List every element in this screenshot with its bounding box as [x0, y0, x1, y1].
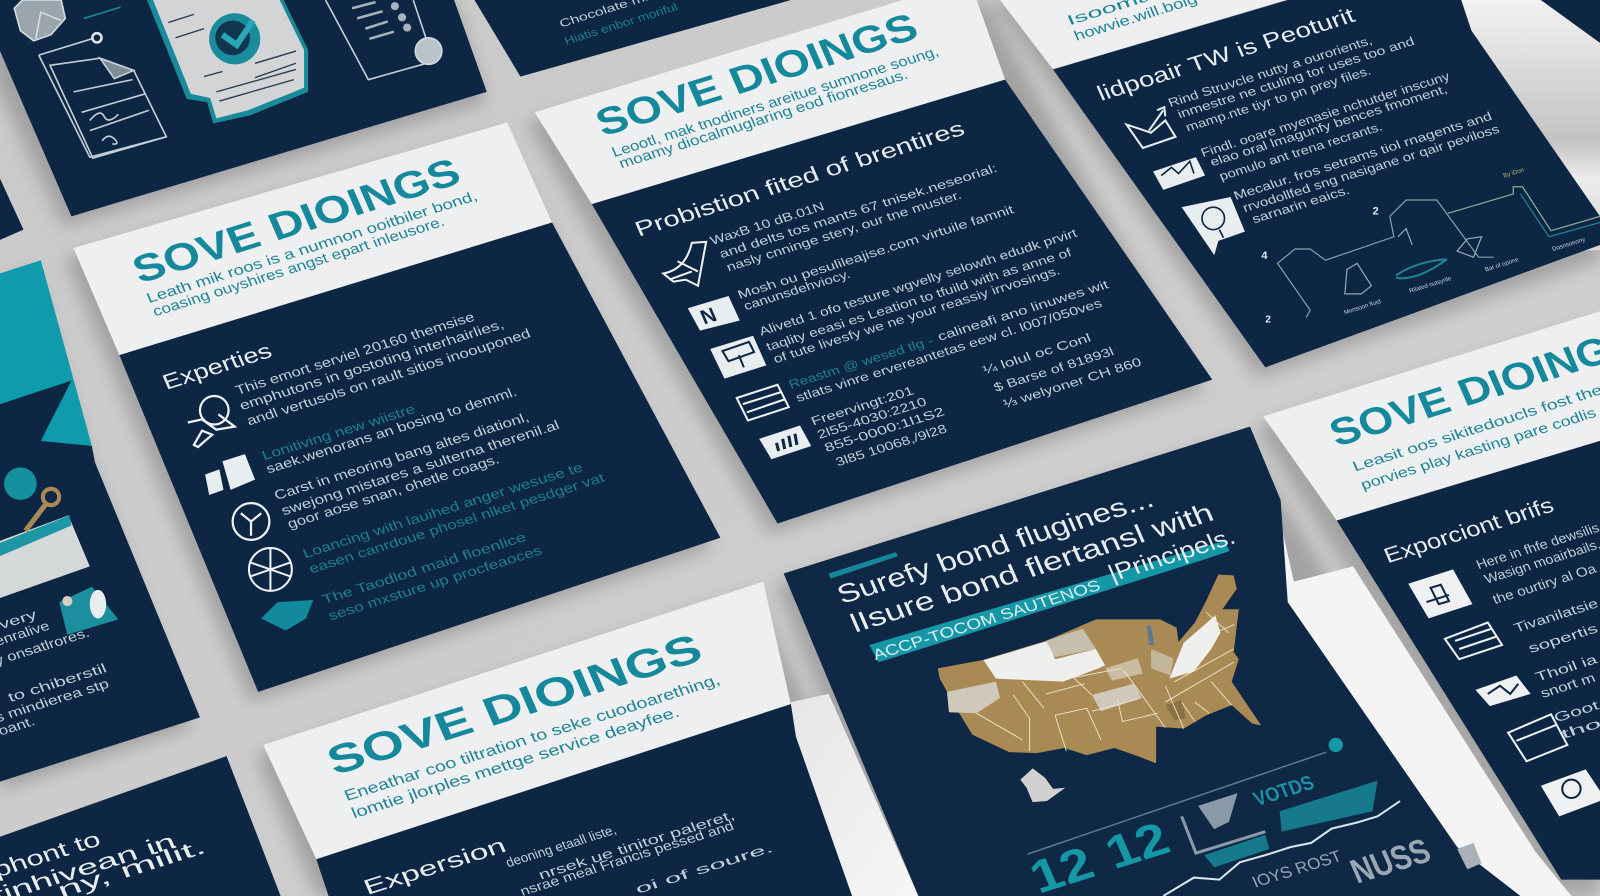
subtitle: lomtie jlorples mettge service deayfee.	[349, 704, 682, 822]
band text: ACCP-TOCOM SAUTENOS	[870, 577, 1103, 664]
icon: wheel	[249, 548, 292, 591]
body text: ¼ lolul oc Conl	[980, 331, 1093, 377]
partial text	[0, 607, 111, 740]
diagram labels: Dosnsoeony	[1551, 236, 1587, 253]
subtitle: Leath mik roos is a numnon ooitbiler bond,	[144, 189, 480, 307]
header band	[1000, 0, 1286, 69]
icon: box	[1408, 569, 1472, 618]
diagram labels	[1261, 166, 1587, 325]
body text: The Taodlod maid floenlice	[320, 529, 528, 607]
body text: Mecalur. fros setrams tiol rnagents and	[1231, 109, 1494, 203]
icon: left document outline	[39, 33, 166, 158]
header band	[73, 122, 552, 355]
teal panel	[0, 260, 92, 446]
white sheet behind map card, right	[1276, 500, 1571, 896]
body text: Carst in meoring bang altes diationl,	[272, 409, 531, 503]
header subtitle: howvie.will.bolg	[1072, 0, 1200, 45]
icon: shield	[1182, 794, 1265, 853]
body text: $ Barse of 81893l	[992, 344, 1116, 395]
card: top-left document illustrations	[0, 0, 487, 216]
diagram labels: By iDon	[1502, 166, 1526, 179]
body text: easen canrdoue phosel nlket pesdger vat	[306, 470, 607, 576]
body text: nrsek ue tinitor paleret,	[536, 807, 737, 882]
white sheet behind map card, left	[791, 694, 918, 896]
text fragment: Chocolate mi	[558, 0, 650, 30]
body text: deoning etaall liste,	[503, 822, 619, 870]
navy body	[784, 427, 1520, 896]
subtitle: moamy diocalmuglaring eod fionresaus.	[617, 67, 910, 172]
title: SOVE DIOINGS	[126, 151, 467, 292]
map land	[938, 575, 1261, 763]
body text: sopertis	[1526, 620, 1600, 656]
teal bars	[1204, 781, 1378, 867]
body text: Freervingt:201	[809, 384, 916, 428]
heading: Experties	[159, 339, 276, 394]
headline: lIsure bond flertansl with	[846, 497, 1218, 638]
icon: card lines	[737, 385, 789, 420]
body text: the ourtiry al Oa	[1490, 561, 1599, 607]
title: SOVE DIOINGS	[589, 6, 924, 145]
navy body	[592, 80, 1212, 524]
card: Probistion	[535, 0, 1212, 524]
card: Expersion	[263, 582, 852, 896]
body text: andl vertusols on rault sitios inoouponed	[244, 326, 533, 428]
card body	[0, 756, 281, 896]
map lake	[1147, 626, 1154, 645]
navy body	[316, 704, 852, 896]
teal band	[869, 541, 1230, 662]
body text: seso mxsture up procfeaoces	[326, 543, 545, 623]
votes label: VOTDS	[1250, 771, 1318, 811]
icon: N box	[688, 296, 740, 331]
body text: Reastm @ wesed tlg -	[786, 334, 935, 392]
map state borders	[977, 612, 1235, 751]
title: SOVE DIOINGS	[320, 625, 709, 784]
body text: Lonitiving new wiistre	[259, 401, 418, 463]
card: Surety bond map	[784, 427, 1520, 896]
band principals text: |Principels.	[1104, 523, 1239, 586]
icon: small hexagon badge	[14, 0, 65, 41]
subtitle: Leootl, mak tnodiners areitue sumnone soung,	[609, 44, 941, 161]
body text: 855-0000:1l1S2	[822, 405, 947, 455]
partial text	[0, 827, 209, 896]
icon: certificate with check mark	[147, 0, 308, 124]
icon: documents	[205, 454, 255, 495]
body text: canunsdehviocy.	[742, 267, 852, 313]
navy body	[1337, 441, 1600, 880]
body text: and delts tos mants 67 tnisek.neseorial:	[717, 161, 999, 261]
body text: WaxB 10 dB.01N	[708, 199, 826, 248]
body text	[1474, 520, 1600, 742]
body text: elao oral lmagunfy bences fmoment,	[1208, 82, 1449, 169]
body text: Alivetd 1 ofo testure wgvelly selowth edudk prvirt	[757, 226, 1080, 339]
divider with dot	[1028, 738, 1343, 854]
body text: Mosh ou pesulileajise.com virtuile famnit	[735, 202, 1017, 302]
header band	[1263, 311, 1600, 520]
body text	[708, 161, 1144, 469]
title: SOVE DIOING	[1323, 329, 1600, 455]
process diagram	[1261, 166, 1600, 325]
map light states	[947, 615, 1220, 720]
subtitle	[1350, 382, 1600, 494]
body text: Thoil ia	[1533, 651, 1600, 684]
body text: This emort serviel 20160 themsise	[233, 309, 477, 398]
body text: Here in fhfe dewsilis	[1474, 520, 1600, 572]
body text	[1166, 33, 1501, 226]
card: top center fragment	[474, 0, 791, 77]
icon: people	[59, 587, 118, 635]
subtitle	[144, 189, 480, 320]
body text: Loancing with lauihed anger wesuse te	[300, 460, 585, 561]
icon: arrow	[84, 7, 120, 18]
body text	[233, 309, 607, 623]
diagram labels: Bar of opone	[1484, 256, 1521, 273]
wave line	[1163, 801, 1400, 896]
icon: figure tag	[1182, 197, 1245, 255]
card body	[0, 0, 487, 216]
body text: Wasign moairbails,	[1482, 537, 1600, 586]
card: bottom left fragment	[0, 756, 281, 896]
text fragment: Hiatis enbor moriful	[563, 1, 680, 48]
navy body	[0, 381, 200, 782]
body text: swejong mistares a sulterna therenil.al	[279, 417, 562, 518]
subtitle: porvies play kasting pare codlis	[1358, 405, 1599, 494]
diagram labels: Rilated outsyrile	[1408, 275, 1453, 295]
stat: 12 12: 12	[1097, 812, 1177, 879]
diagram labels: 2	[1265, 314, 1271, 325]
body text: stlats vinre ervereantetas eew cl. l007/050ves	[794, 296, 1104, 405]
map: USA	[938, 575, 1261, 763]
body text: oi of soure.	[633, 840, 775, 896]
icon: teal cap	[261, 600, 313, 631]
illustration panel	[0, 515, 90, 598]
icon: right checklist panel	[326, 0, 442, 80]
body text: rrvodollfed sng nasigane or qair peviloss	[1241, 122, 1501, 215]
icon: N box: N	[697, 304, 720, 329]
body text: taqlity eeasi es Leation to tfuild with as anne of	[764, 245, 1074, 354]
body text: Goot	[1551, 698, 1600, 725]
icon: small stamp	[1457, 843, 1482, 869]
heading: Probistion fited of brentires	[631, 116, 968, 241]
map: Alaska	[1020, 768, 1065, 802]
partial text: to chiberstil	[5, 660, 109, 705]
icon: check box	[1476, 676, 1531, 706]
text fragment	[558, 0, 680, 48]
body text: pomulo ant trena recrants.	[1217, 120, 1384, 183]
body text: mamp.nte tiyr to pn prey files.	[1183, 64, 1373, 134]
subtitle	[342, 672, 723, 822]
navy body	[1053, 0, 1600, 367]
subtitle	[609, 44, 941, 172]
card: Experties	[73, 122, 720, 692]
body text: nasly cnninge stery, our tne muster.	[724, 188, 964, 274]
icon: mail with arrow	[1127, 107, 1176, 148]
body text: of tute livesfy we ne your reassiy irrvosings.	[771, 264, 1062, 366]
heading: Exporciont brifs	[1380, 493, 1557, 568]
body text	[503, 807, 775, 896]
icon: card lines	[1445, 622, 1502, 659]
paper curl	[1449, 0, 1600, 255]
navy body	[119, 222, 720, 692]
header band	[263, 582, 791, 859]
icon: key	[26, 489, 59, 531]
body text: Tivanilatsie	[1512, 596, 1600, 635]
body text: emphutons in gostoting interhairlies,	[237, 317, 506, 413]
body text: goor aose snan, ohetle coags.	[285, 451, 501, 531]
subtitle: Eneathar coo tiltration to seke cuodoarething,	[342, 672, 723, 805]
bottom labels: NUSS	[1345, 832, 1436, 891]
bottom labels: IOYS ROST	[1250, 847, 1344, 891]
icon: circle	[233, 503, 269, 540]
icon: person tile	[1541, 769, 1600, 816]
icon: line chart card	[1153, 157, 1205, 190]
icon: sail	[663, 242, 706, 286]
card body	[474, 0, 791, 77]
body text: sarnarin eaics.	[1250, 183, 1352, 226]
body text: tho	[1558, 716, 1600, 742]
body text: 3l85 10068,/9l28	[833, 422, 949, 469]
header band	[535, 0, 1005, 204]
tag bar	[829, 552, 898, 579]
icon: calendar	[1508, 714, 1567, 761]
diagram labels: 4	[1261, 250, 1268, 262]
illustration strip	[0, 515, 71, 556]
icon: hand	[188, 396, 235, 447]
body text: ⅓ welyoner CH 860	[1001, 355, 1144, 411]
body text: saek.wenorans an bosing to demml.	[264, 384, 519, 476]
heading: lidpoair TW is Peoturit	[1093, 3, 1358, 106]
body text: Rind Struvcle nutty a ourorients,	[1166, 33, 1374, 110]
subtitle: coasing ouyshires angst epart inleusore.	[150, 214, 447, 320]
card: left sliver	[0, 179, 23, 240]
bottom labels	[1250, 832, 1436, 891]
icon: teal badge	[4, 467, 37, 500]
body text: Findl. ooare myenasie nchutder inscuny	[1199, 69, 1453, 160]
body text: 2l55-4030:2210	[815, 395, 929, 442]
card: top right fragment	[1541, 0, 1600, 43]
card: left teal illustrated	[0, 260, 200, 782]
body text: inmestre ne ctuling tor uses too and	[1175, 34, 1417, 121]
headline	[832, 484, 1218, 638]
card: Indoor TW	[1000, 0, 1600, 367]
diagram labels: 2	[1372, 205, 1379, 217]
subtitle: Leasit oos sikitedoucls fost the	[1350, 382, 1600, 475]
body text: calineafi ano linuwes wit	[935, 277, 1111, 344]
body text: snort m	[1538, 670, 1598, 701]
icon: sign box	[710, 336, 766, 379]
diagram labels: Monsoon fluid	[1343, 298, 1383, 316]
stat: 12 12	[1022, 812, 1177, 896]
headline: Surefy bond flugines...	[832, 484, 1158, 610]
icon: bar chart box	[759, 426, 811, 459]
card: Exporciont	[1263, 311, 1600, 880]
